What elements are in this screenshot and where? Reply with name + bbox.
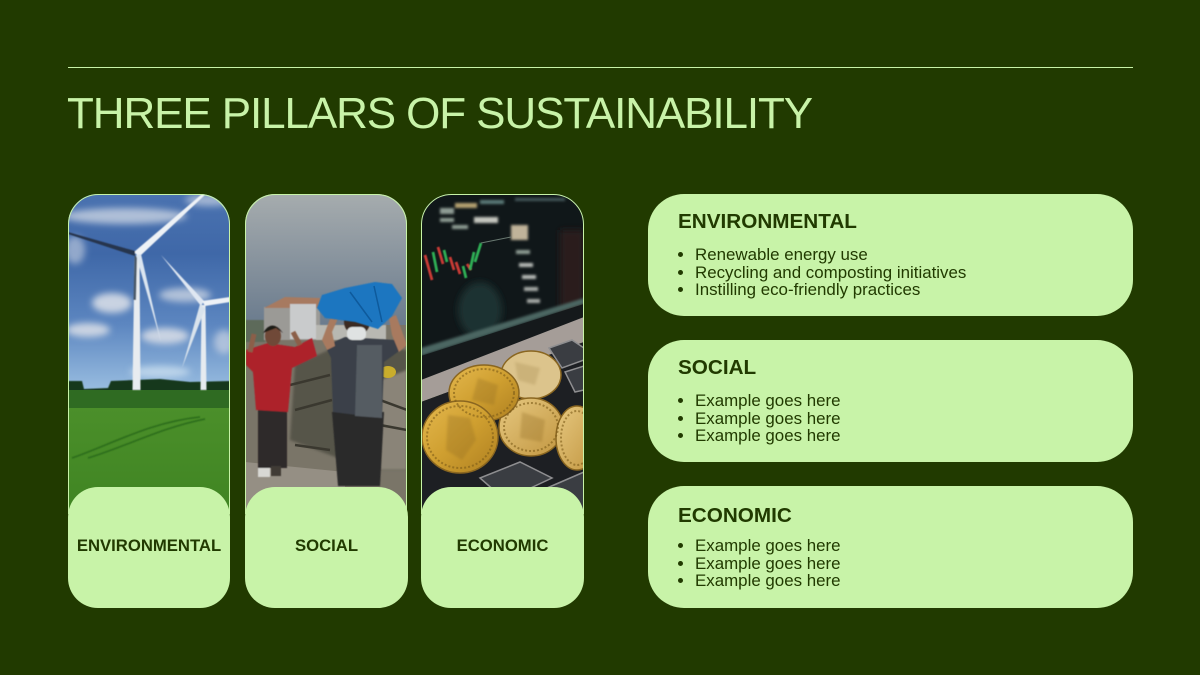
list: economic [678, 536, 841, 590]
list: economic: Example goes here [695, 536, 841, 555]
photo: wind turbines [63, 194, 235, 518]
near turbine [68, 194, 206, 390]
list: environmental: Instilling eco-friendly practices [695, 280, 920, 299]
label: social [245, 486, 408, 608]
far turbine [161, 255, 230, 390]
candlestick chart [425, 243, 481, 280]
card: environmental [648, 194, 1133, 316]
laptop body [421, 317, 584, 402]
photo outlines [68, 194, 584, 514]
list: economic: Example goes here [695, 554, 841, 573]
blue load [317, 282, 402, 329]
list: social: Example goes here [695, 426, 841, 445]
label: environmental: ENVIRONMENTAL [77, 536, 221, 555]
field [69, 390, 229, 408]
screen text [440, 198, 565, 303]
list: social [678, 391, 841, 445]
blurred screen glow [458, 282, 502, 338]
list: social: Example goes here [695, 409, 841, 428]
card heading: economic: ECONOMIC [678, 504, 792, 527]
list: environmental: Recycling and composting initiatives [695, 263, 966, 282]
card heading: social: SOCIAL [678, 356, 756, 379]
buildings [245, 297, 386, 342]
photo: trading chart and coins [421, 194, 584, 510]
ground and rubble [245, 325, 407, 515]
label: environmental [68, 486, 230, 608]
photo: people carrying goods [245, 194, 407, 515]
tree line [68, 379, 230, 392]
card: economic [648, 486, 1133, 608]
list: environmental: Renewable energy use [695, 245, 868, 264]
keyboard [478, 339, 583, 509]
laptop screen strip [421, 298, 584, 356]
person with mask and blue load [322, 298, 407, 486]
label: economic [421, 486, 584, 608]
label: social: SOCIAL [295, 536, 358, 555]
card: social [648, 340, 1133, 462]
top rule [68, 67, 1133, 68]
person in red jacket [246, 326, 317, 477]
list: social: Example goes here [695, 391, 841, 410]
photo panels [68, 194, 584, 514]
card heading: environmental: ENVIRONMENTAL [678, 210, 857, 233]
list: environmental [678, 245, 966, 299]
list: economic: Example goes here [695, 571, 841, 590]
coins [422, 351, 598, 473]
title: THREE PILLARS OF SUSTAINABILITY [67, 89, 812, 138]
label: economic: ECONOMIC [457, 536, 548, 555]
